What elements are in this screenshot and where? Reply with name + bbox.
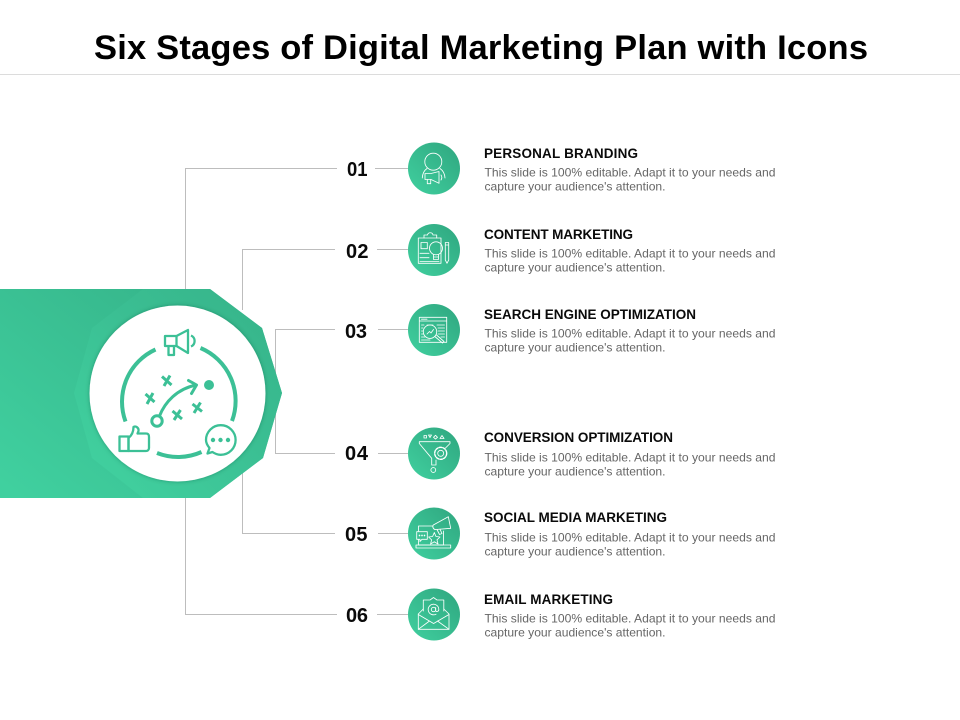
text: social media marketing [484, 510, 776, 558]
icon: chat bubble [206, 425, 236, 455]
text: personal branding [484, 146, 776, 194]
number 01: 01 [347, 159, 368, 181]
icon: funnel with gear [419, 435, 450, 472]
stage 05: social media marketing [345, 508, 776, 560]
number 03: 03 [345, 321, 367, 343]
text: content marketing: CONTENT MARKETING [484, 227, 633, 242]
text: email marketing [484, 592, 776, 640]
icon: web page with magnifier [419, 317, 447, 343]
icon: play arrow [146, 376, 214, 426]
icon: megaphone [165, 330, 195, 355]
icon: laptop with megaphone, chat and star [416, 517, 451, 548]
text: email marketing: capture your audience's attention. [484, 626, 666, 640]
text: content marketing: capture your audience's attention. [484, 260, 666, 274]
text: personal branding: This slide is 100% editable. Adapt it to your needs and [484, 166, 776, 180]
text: email marketing: This slide is 100% editable. Adapt it to your needs and [484, 612, 776, 626]
number 05: 05 [345, 524, 368, 546]
text: social media marketing: This slide is 100% editable. Adapt it to your needs and [484, 530, 776, 544]
stage 04: conversion optimization [345, 428, 776, 480]
text: personal branding: capture your audience's attention. [484, 180, 666, 194]
number 06: 06 [346, 605, 368, 627]
central hexagonal banner [0, 289, 282, 498]
text: conversion optimization: capture your audience's attention. [484, 464, 666, 478]
text: seo: capture your audience's attention. [484, 340, 666, 354]
text: social media marketing: capture your audience's attention. [484, 544, 666, 558]
icon: person with megaphone [422, 153, 445, 184]
text: conversion optimization: CONVERSION OPTIMIZATION [484, 430, 673, 445]
text: seo: This slide is 100% editable. Adapt it to your needs and [484, 326, 776, 340]
central white circle [90, 306, 266, 482]
text: conversion optimization [484, 430, 776, 478]
number 04: 04 [345, 443, 369, 465]
stage 06: email marketing [346, 588, 776, 640]
icon: strategy plan with megaphone, like and chat [120, 330, 236, 457]
text: content marketing: This slide is 100% editable. Adapt it to your needs and [484, 246, 776, 260]
stage 01: personal branding [347, 142, 776, 194]
text: seo: SEARCH ENGINE OPTIMIZATION [484, 307, 696, 322]
text: email marketing: EMAIL MARKETING [484, 592, 613, 607]
icon: thumbs up [120, 427, 149, 451]
number 02: 02 [346, 241, 368, 263]
text: social media marketing: SOCIAL MEDIA MARKETING [484, 510, 667, 525]
stage 03: search engine optimization [345, 304, 776, 356]
icon: open envelope with at sign [418, 598, 449, 629]
icon: clipboard with lightbulb [418, 233, 449, 263]
text: conversion optimization: This slide is 100% editable. Adapt it to your needs and [484, 450, 776, 464]
text: content marketing [484, 227, 776, 274]
stage 02: content marketing [346, 224, 776, 276]
text: seo [484, 307, 776, 354]
text: personal branding: PERSONAL BRANDING [484, 146, 638, 161]
connector lines [186, 168, 408, 614]
title: Six Stages of Digital Marketing Plan with Icons [94, 29, 868, 67]
